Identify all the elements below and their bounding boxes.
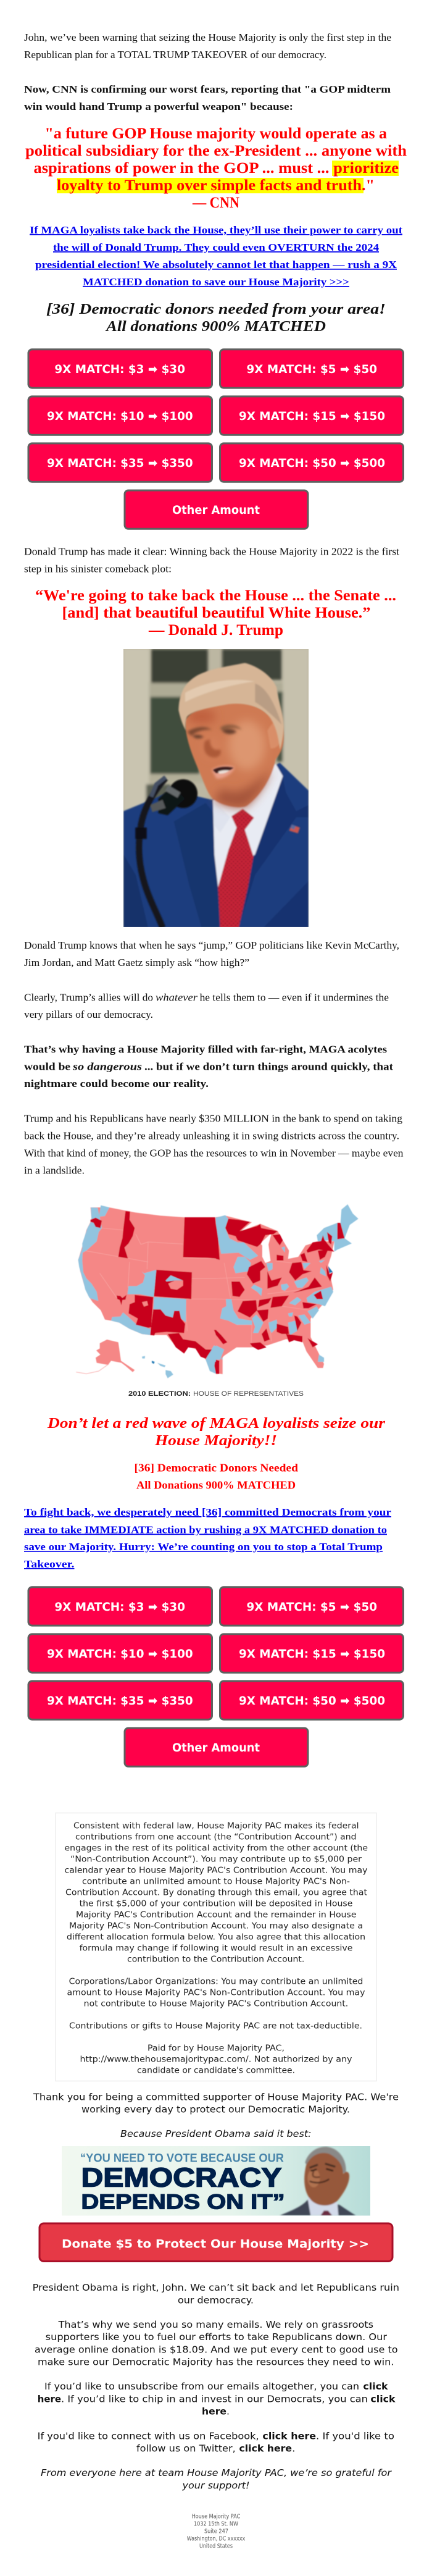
- closing paragraph: Obama is right: [33, 2282, 399, 2306]
- intro paragraph: [24, 31, 391, 61]
- bold paragraph: CNN report: Now, CNN is confirming our worst fears, reporting that "a GOP midterm: [24, 83, 391, 95]
- donation link paragraph 2: area to take IMMEDIATE action by rushing a 9X MATCHED donation to: [24, 1524, 387, 1535]
- button: other amount: [125, 490, 308, 529]
- button: $3: 9X MATCH: $3 ➡ $30: [54, 1600, 185, 1614]
- button: $50: 9X MATCH: $50 ➡ $500: [239, 1694, 385, 1708]
- disclaimer box: Majority PAC's Contribution Account and the remainder in House: [76, 1910, 357, 1919]
- button: $5: [220, 350, 404, 388]
- paragraph: allies: whatever: [156, 992, 197, 1004]
- paragraph: allies: [24, 992, 389, 1020]
- banner: Obama quote: [62, 2146, 370, 2216]
- disclaimer box: the first $5,000 of your contribution will be deposited in House: [80, 1899, 352, 1908]
- button: other amount: Other Amount: [172, 1741, 260, 1755]
- photo: Obama: [280, 2147, 356, 2215]
- footer address: 1032 15th St. NW: [194, 2521, 239, 2527]
- closing paragraph: unsubscribe: If you’d like to unsubscribe from our emails altogether, you can: [44, 2381, 359, 2392]
- bold paragraph: dangerous: would be: [24, 1061, 71, 1072]
- red CNN quote with highlight: "a future GOP House majority would operate as a: [44, 125, 388, 142]
- red donate button: Donate $5 to Protect Our House Majority >>: [62, 2237, 369, 2251]
- suit: [123, 763, 309, 928]
- donation link paragraph: MATCHED donation to save our House Majority >>>: [83, 276, 349, 288]
- button: $15: [220, 396, 404, 435]
- closing paragraph: unsubscribe: here: [38, 2394, 61, 2405]
- paragraph: jump: Jim Jordan, and Matt Gaetz simply ask “how high?”: [24, 957, 249, 968]
- bold paragraph: dangerous: so dangerous: [72, 1061, 142, 1072]
- closing paragraph: social: follow us on Twitter,: [136, 2443, 236, 2454]
- paragraph: money: [24, 1113, 404, 1176]
- red CNN quote with highlight: loyalty to Trump over simple facts and truth.": [57, 177, 375, 194]
- disclaimer box: calendar year to House Majority PAC's Contribution Account. You may: [64, 1866, 368, 1875]
- red Trump quote: [and] that beautiful beautiful White House.”: [62, 605, 370, 621]
- paragraph: comeback plot: Donald Trump has made it clear: Winning back the House Majority in 2022 is the first: [24, 546, 399, 558]
- paragraph: jump: Donald Trump knows that when he says “jump,” GOP politicians like Kevin McCarthy,: [24, 939, 399, 951]
- map caption: HOUSE OF REPRESENTATIVES: [193, 1390, 304, 1398]
- button: $5: 9X MATCH: $5 ➡ $50: [247, 363, 377, 376]
- map east half: [216, 1204, 359, 1374]
- closing paragraph: emails: supporters like you to fuel our efforts to take Republicans down. Our: [46, 2331, 388, 2343]
- red Trump quote: “We're going to take back the House ... the Senate ...: [35, 587, 396, 604]
- closing paragraph: social: click here: [262, 2430, 316, 2441]
- disclaimer box: Majority PAC's Non-Contribution Account. You may also designate a: [69, 1921, 363, 1931]
- intro paragraph: John, we’ve been warning that seizing the House Majority is only the first step in the: [24, 31, 391, 43]
- donation link paragraph: [30, 224, 402, 288]
- closing paragraph: social: [38, 2430, 394, 2454]
- disclaimer box: engages in the rest of its political activity from the other account (the: [64, 1844, 368, 1853]
- closing paragraph: emails: make sure our Democratic Majority has the resources they need to win.: [38, 2357, 394, 2368]
- closing thanks: your support!: [181, 2480, 249, 2491]
- button: $35: [28, 1681, 212, 1719]
- footer address: [187, 2514, 246, 2549]
- bold paragraph: dangerous: [24, 1043, 393, 1089]
- red heading: red wave: [47, 1416, 386, 1449]
- hair: [178, 663, 284, 749]
- disclaimer box: Paid for by House Majority PAC,: [147, 2044, 285, 2053]
- paragraph: money: back the House, and they’re already unleashing it in swing districts across the country.: [24, 1130, 399, 1141]
- thank you text: [33, 2091, 399, 2115]
- bold paragraph: CNN report: win would hand Trump a powerful weapon" because:: [24, 101, 293, 112]
- red Trump quote: [35, 587, 396, 639]
- disclaimer box: “Non-Contribution Account”). You may contribute up to $5,000 per: [70, 1855, 362, 1864]
- red CNN quote with highlight: — CNN: [192, 195, 239, 211]
- donation link paragraph: If MAGA loyalists take back the House, they’ll use their power to carry out: [30, 224, 402, 236]
- button: other amount: [125, 1728, 308, 1766]
- paragraph: allies: Clearly, Trump’s allies will do: [24, 992, 153, 1004]
- paragraph: money: With that kind of money, the GOP has the resources to win in November — maybe even: [24, 1147, 404, 1159]
- red CNN quote with highlight: aspirations of power in the GOP ... must ... prioritize: [33, 160, 399, 177]
- neck and face: [185, 702, 284, 807]
- heading: donors needed: [36] Democratic donors needed from your area!: [46, 301, 386, 317]
- shirt: [213, 764, 283, 887]
- button: $5: 9X MATCH: $5 ➡ $50: [247, 1600, 377, 1614]
- button: $50: 9X MATCH: $50 ➡ $500: [239, 456, 385, 470]
- bold paragraph: dangerous: That’s why having a House Majority filled with far-right, MAGA acolytes: [24, 1043, 387, 1055]
- button: $3: [28, 350, 212, 388]
- button: other amount: Other Amount: [172, 503, 260, 517]
- closing paragraph: social: .: [292, 2443, 296, 2454]
- red CNN quote with highlight: [25, 125, 407, 211]
- button: $50: [220, 1681, 404, 1719]
- donation link paragraph 2: [24, 1506, 392, 1570]
- closing paragraph: unsubscribe: here: [202, 2406, 226, 2417]
- button: $10: [28, 396, 212, 435]
- closing paragraph: social: If you'd like to connect with us on Facebook,: [38, 2430, 259, 2441]
- button: $3: 9X MATCH: $3 ➡ $30: [54, 363, 185, 376]
- button: $10: 9X MATCH: $10 ➡ $100: [47, 409, 193, 423]
- disclaimer box: contribution to the Contribution Account.: [127, 1955, 304, 1964]
- closing paragraph: social: click here: [239, 2443, 292, 2454]
- donation link paragraph 2: To fight back, we desperately need [36] committed Democrats from your: [24, 1506, 392, 1518]
- Obama lead-in: Because President Obama said it best:: [120, 2128, 311, 2139]
- button: $3: [28, 1587, 212, 1626]
- banner: Obama quote: DEMOCRACY: [81, 2163, 281, 2193]
- map: 2010 House election districts: [76, 1204, 359, 1398]
- paragraph: comeback plot: step in his sinister comeback plot:: [24, 563, 172, 574]
- button: $15: [220, 1634, 404, 1672]
- closing paragraph: social: . If you'd like to: [316, 2430, 394, 2441]
- paragraph: comeback plot: [24, 546, 399, 574]
- closing paragraph: Obama is right: President Obama is right, John. We can’t sit back and let Republicans ruin: [33, 2282, 399, 2293]
- donation link paragraph 2: save our Majority. Hurry: We’re counting on you to stop a Total Trump: [24, 1541, 383, 1553]
- donation link paragraph: presidential election! We absolutely cannot let that happen — rush a 9X: [35, 259, 397, 271]
- button: $15: 9X MATCH: $15 ➡ $150: [239, 409, 385, 423]
- red subheading: donors needed: [36] Democratic Donors Needed: [135, 1461, 298, 1474]
- button: $10: [28, 1634, 212, 1672]
- photo: Trump at microphone: [123, 648, 309, 928]
- flag pin: [289, 824, 300, 833]
- closing paragraph: unsubscribe: . If you’d like to chip in and invest in our Democrats, you can: [61, 2394, 368, 2405]
- button: $35: 9X MATCH: $35 ➡ $350: [47, 456, 193, 470]
- footer address: House Majority PAC: [192, 2514, 241, 2520]
- disclaimer box: Contributions or gifts to House Majority PAC are not tax-deductible.: [69, 2021, 362, 2031]
- closing paragraph: emails: That’s why we send you so many emails. We rely on grassroots: [58, 2319, 373, 2330]
- footer address: Suite 247: [204, 2528, 228, 2535]
- footer address: United States: [199, 2543, 233, 2549]
- disclaimer box: different allocation formula below. You also agree that this allocation: [67, 1932, 365, 1942]
- map west half: [76, 1206, 223, 1378]
- closing paragraph: emails: average online donation is $18.09. And we put every cent to good use to: [35, 2344, 398, 2356]
- red donate button: [39, 2223, 393, 2262]
- disclaimer box: candidate or candidate's committee.: [137, 2066, 295, 2075]
- map caption: [128, 1390, 304, 1398]
- button: $35: [28, 443, 212, 482]
- closing thanks: [41, 2467, 393, 2491]
- disclaimer box: contributions from one account (the “Contribution Account”) and: [75, 1832, 357, 1842]
- disclaimer box: http://www.thehousemajoritypac.com/. Not authorized by any: [80, 2055, 352, 2064]
- disclaimer box: Corporations/Labor Organizations: You may contribute an unlimited: [69, 1977, 363, 1986]
- red heading: red wave: House Majority!!: [154, 1433, 277, 1449]
- closing thanks: From everyone here at team House Majority PAC, we’re so grateful for: [41, 2467, 393, 2478]
- disclaimer box: [56, 1813, 376, 2081]
- disclaimer box: Consistent with federal law, House Majority PAC makes its federal: [73, 1821, 359, 1831]
- disclaimer box: contribute an unlimited amount to House Majority PAC's Non-: [82, 1877, 350, 1886]
- donation buttons, second set: [28, 1587, 404, 1766]
- thank you text: Thank you for being a committed supporter of House Majority PAC. We're: [33, 2091, 399, 2102]
- button: $50: [220, 443, 404, 482]
- map caption: 2010 ELECTION:: [128, 1390, 191, 1398]
- disclaimer box: amount to House Majority PAC's Non-Contribution Account. You may: [67, 1988, 365, 1997]
- disclaimer box: formula may change if following it would result in an excessive: [80, 1944, 352, 1953]
- donation buttons, first set: [28, 350, 404, 529]
- paragraph: allies: very pillars of our democracy.: [24, 1009, 153, 1020]
- closing paragraph: unsubscribe: click: [363, 2381, 388, 2392]
- button: $15: 9X MATCH: $15 ➡ $150: [239, 1647, 385, 1661]
- button: $35: 9X MATCH: $35 ➡ $350: [47, 1694, 193, 1708]
- banner: Obama quote: DEPENDS ON IT”: [81, 2191, 285, 2214]
- heading: donors needed: All donations 900% MATCHED: [105, 319, 326, 335]
- closing paragraph: emails: [35, 2319, 398, 2368]
- closing paragraph: Obama is right: our democracy.: [178, 2295, 254, 2306]
- bold paragraph: dangerous: nightmare could become our reality.: [24, 1078, 209, 1089]
- closing paragraph: unsubscribe: click: [370, 2394, 396, 2405]
- button: $10: 9X MATCH: $10 ➡ $100: [47, 1647, 193, 1661]
- donation link paragraph: the will of Donald Trump. They could even OVERTURN the 2024: [53, 241, 380, 253]
- red heading: red wave: Don’t let a red wave of MAGA loyalists seize our: [47, 1416, 386, 1432]
- closing paragraph: unsubscribe: .: [226, 2406, 230, 2417]
- red CNN quote with highlight: political subsidiary for the ex-President ... anyone with: [25, 143, 407, 159]
- bold paragraph: dangerous: ... but if we don’t turn things around quickly, that: [144, 1061, 393, 1072]
- red subheading: donors needed: All Donations 900% MATCHED: [136, 1479, 296, 1491]
- button: $5: [220, 1587, 404, 1626]
- paragraph: allies: he tells them to — even if it undermines the: [200, 992, 389, 1004]
- microphone: [168, 779, 197, 808]
- bold paragraph: CNN report: [24, 83, 391, 112]
- thank you text: working every day to protect our Democratic Majority.: [81, 2104, 350, 2115]
- donation link paragraph 2: Takeover.: [24, 1558, 74, 1570]
- tie: [218, 808, 254, 928]
- paragraph: jump: [24, 939, 399, 968]
- intro paragraph: Republican plan for a TOTAL TRUMP TAKEOVER of our democracy.: [24, 49, 326, 61]
- closing paragraph: unsubscribe: [38, 2381, 396, 2417]
- heading: donors needed: [46, 301, 386, 335]
- paragraph: money: Trump and his Republicans have nearly $350 MILLION in the bank to spend on taking: [24, 1113, 403, 1125]
- red subheading: donors needed: [135, 1461, 298, 1491]
- footer address: Washington, DC xxxxxx: [187, 2536, 246, 2543]
- disclaimer box: Contribution Account. By donating through this email, you agree that: [65, 1888, 367, 1897]
- disclaimer box: not contribute to House Majority PAC's Contribution Account.: [84, 1999, 348, 2008]
- red Trump quote: — Donald J. Trump: [148, 622, 283, 639]
- banner: Obama quote: “YOU NEED TO VOTE BECAUSE OUR: [80, 2152, 284, 2165]
- paragraph: money: in a landslide.: [24, 1164, 85, 1176]
